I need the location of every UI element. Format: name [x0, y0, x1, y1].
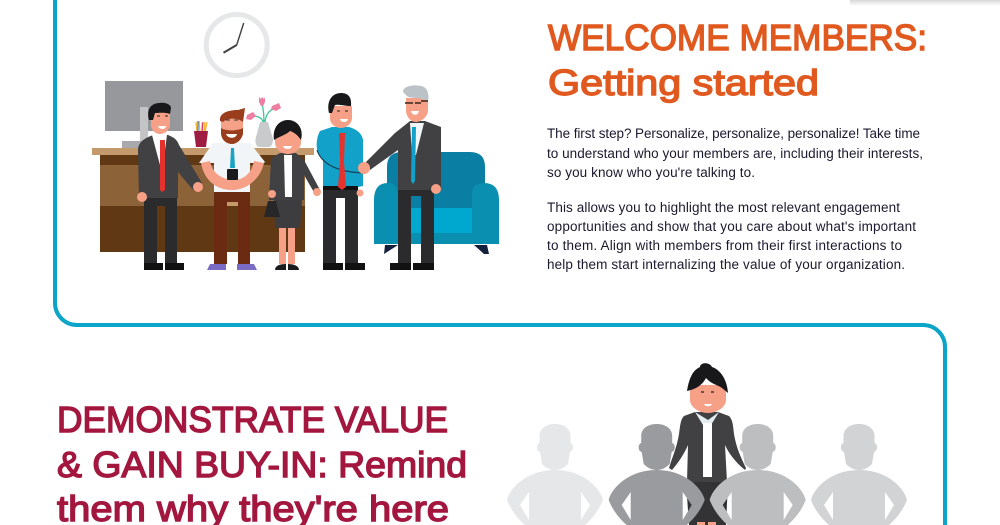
- person: businesswoman standing out from group: [669, 363, 746, 525]
- text block: engagement: to them. Align with members from their first interactions to: [547, 238, 902, 253]
- person: man in grey suit with red tie: [137, 103, 203, 270]
- heading: demonstrate value: DEMONSTRATE VALUE: [57, 399, 448, 440]
- illustration: reception desk and computer: [92, 81, 314, 252]
- heading: demonstrate value: & GAIN BUY-IN: Remind: [57, 444, 467, 485]
- text block: personalize: to understand who your members are, including their interests,: [547, 146, 923, 161]
- person: woman with handbag: [264, 120, 321, 270]
- heading: welcome members: [548, 17, 927, 103]
- silhouette: dark group member 2: [609, 424, 705, 525]
- text block: engagement: help them start internalizing the value of your organization.: [547, 257, 905, 272]
- icon: wall clock: [206, 14, 267, 76]
- silhouette: faded group member 1: [507, 424, 603, 525]
- silhouette: medium group member 3: [710, 424, 806, 525]
- icon: vase with flowers: [246, 97, 281, 147]
- person: older man in grey suit with glasses: [358, 85, 441, 270]
- heading: welcome members: Getting started: [548, 62, 819, 103]
- illustration: blue armchair: [374, 152, 499, 254]
- icon: pencil cup: [194, 121, 208, 147]
- heading: demonstrate value: [57, 399, 467, 525]
- text block: engagement: This allows you to highlight the most relevant engagement: [547, 200, 900, 215]
- heading: welcome members: WELCOME MEMBERS:: [548, 17, 927, 58]
- text block: personalize: The first step? Personalize, personalize, personalize! Take time: [547, 126, 920, 141]
- text block: personalize: so you know who you're talking to.: [547, 165, 755, 180]
- silhouette: light group member 4: [811, 424, 907, 525]
- person: man in blue shirt shaking hands: [317, 93, 365, 270]
- person: bearded man with phone: [199, 108, 265, 270]
- text block: engagement: [547, 200, 916, 272]
- text block: engagement: opportunities and show that you care about what's important: [547, 219, 916, 234]
- text block: personalize: [547, 126, 923, 180]
